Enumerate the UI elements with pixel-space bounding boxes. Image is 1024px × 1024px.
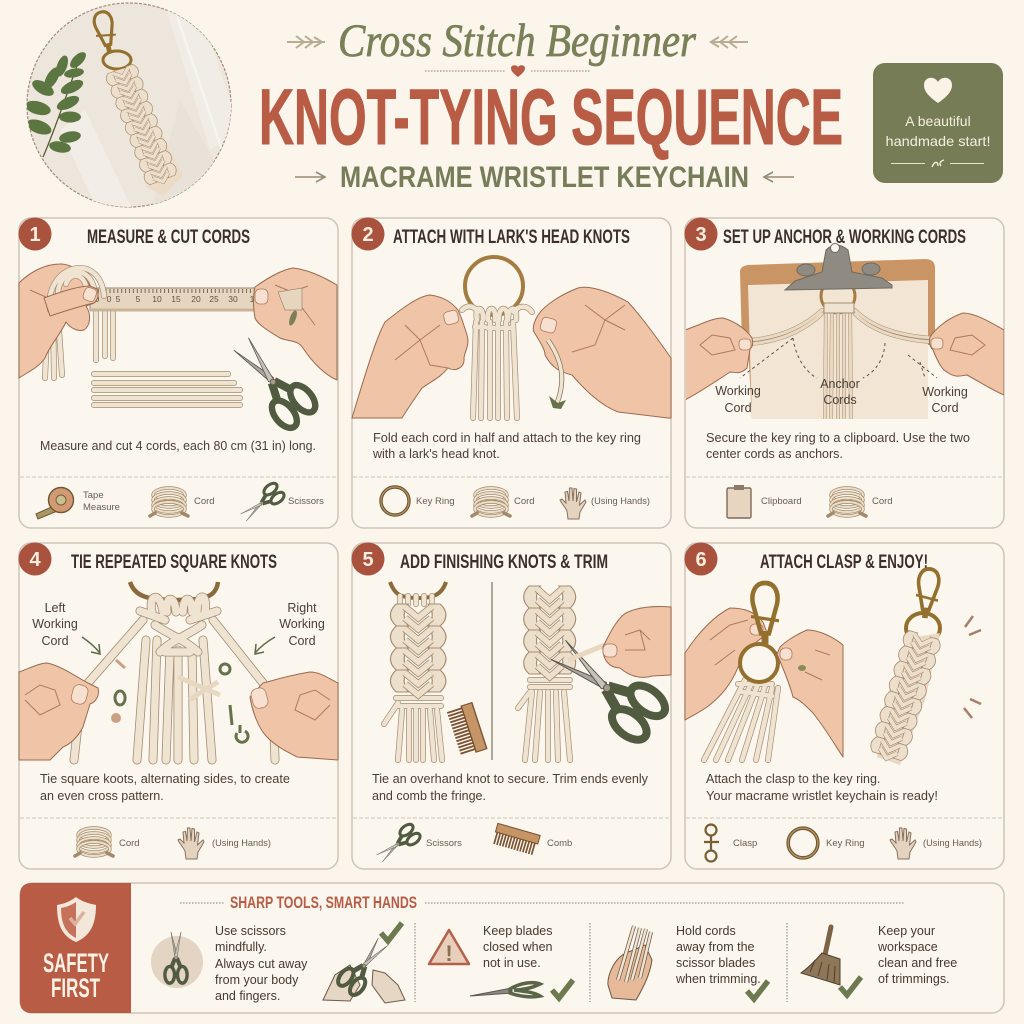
label working cord right: Cord bbox=[931, 401, 959, 415]
clasp bbox=[751, 583, 779, 644]
left hand bbox=[19, 663, 99, 760]
tip 1 text: Always cut away bbox=[215, 957, 308, 971]
subtitle arrow right bbox=[764, 172, 794, 182]
scissors icon bbox=[237, 481, 286, 525]
instruction 2: Fold each cord in half and attach to the key ring bbox=[373, 431, 641, 445]
panel 6: attach clasp and enjoy bbox=[684, 542, 1004, 869]
ruler bbox=[90, 288, 300, 310]
ruler: 5 bbox=[136, 294, 141, 304]
key ring on board bbox=[820, 289, 856, 314]
scissors bbox=[542, 629, 671, 746]
instruction 5: Tie an overhand knot to secure. Trim ends evenly bbox=[372, 772, 649, 786]
tip 1 illustration: hands with scissors bbox=[323, 933, 405, 1003]
fringe in progress bbox=[704, 680, 778, 760]
finished keychain bbox=[868, 568, 942, 765]
left hand bbox=[352, 295, 468, 418]
tip 3 illustration: hand holding cords bbox=[608, 926, 652, 1000]
badge: handmade start! bbox=[886, 133, 990, 149]
ruler: 10 bbox=[152, 294, 162, 304]
cord label: Cord bbox=[872, 496, 893, 507]
panel 3: set up anchor and working cords: center cords as anchors. bbox=[706, 447, 843, 461]
tip 1 text: mindfully. bbox=[215, 940, 267, 954]
right hand bbox=[777, 630, 843, 757]
right hand bbox=[929, 313, 1004, 395]
label working cord left: Cord bbox=[724, 401, 752, 415]
scissors label: Scissors bbox=[288, 496, 324, 507]
comb icon bbox=[492, 823, 540, 856]
tip 4 text: clean and free bbox=[878, 956, 957, 970]
hands label: (Using Hands) bbox=[212, 838, 271, 849]
tip 3 text: when trimming. bbox=[675, 972, 761, 986]
label right working cord: Working bbox=[279, 617, 325, 631]
scissors bbox=[225, 330, 320, 432]
right hand bbox=[533, 287, 671, 418]
ruler: 25 bbox=[209, 294, 219, 304]
tip 2 icon: warning triangle: ! bbox=[445, 941, 453, 966]
clasp icon bbox=[704, 824, 719, 862]
hand holding cord bbox=[568, 607, 671, 677]
tip 2 text: not in use. bbox=[483, 956, 541, 970]
label left working cord: Cord bbox=[41, 634, 69, 648]
instruction 4: Tie square koots, alternating sides, to create bbox=[40, 772, 290, 786]
tip 1 icon: scissors in circle bbox=[151, 932, 203, 988]
cord icon bbox=[150, 488, 188, 516]
folding cord with arrow bbox=[548, 340, 566, 409]
leaf sprig bbox=[27, 52, 86, 158]
safety panel bbox=[20, 883, 1004, 1013]
left braid with ring bbox=[384, 582, 446, 760]
step number 5: 5 bbox=[362, 549, 374, 571]
cord label: Cord bbox=[119, 838, 140, 849]
key ring icon bbox=[381, 487, 409, 515]
hanging cords bbox=[45, 300, 113, 378]
keychain clasp and ring bbox=[91, 10, 131, 69]
panel 2: attach with lark's head knots bbox=[352, 218, 671, 528]
cord label: Cord bbox=[514, 496, 535, 507]
header photo: finished keychain on linen bbox=[24, 3, 240, 215]
step number 2 bbox=[352, 218, 384, 250]
tip 2 text: closed when bbox=[483, 940, 553, 954]
hands icon bbox=[178, 828, 204, 859]
knot cluster bbox=[140, 597, 217, 652]
hands label: (Using Hands) bbox=[591, 496, 650, 507]
ruler: 15 bbox=[171, 294, 181, 304]
label right working cord: Right bbox=[287, 601, 317, 615]
ruler: 0 bbox=[107, 294, 112, 304]
cord icon bbox=[75, 828, 113, 856]
badge bbox=[873, 63, 1003, 183]
tip 2 text: Keep blades bbox=[483, 924, 553, 938]
tape measure label: Tape bbox=[83, 490, 104, 501]
ruler: 30 bbox=[228, 294, 238, 304]
step number 3 bbox=[684, 218, 718, 250]
heart divider bbox=[425, 65, 591, 77]
panel 4: tie repeated square knots bbox=[18, 542, 338, 869]
subtitle arrow left bbox=[295, 172, 325, 182]
panel 1: measure and cut cords bbox=[18, 218, 338, 528]
key ring arc bbox=[130, 582, 218, 600]
panel 6: attach clasp and enjoy: Your macrame wristlet keychain is ready! bbox=[706, 789, 938, 803]
ruler: 0 bbox=[95, 294, 100, 304]
key ring bbox=[740, 644, 778, 682]
step number 1: 1 bbox=[29, 224, 41, 246]
panel 5: add finishing knots and trim bbox=[352, 542, 671, 869]
comb bbox=[447, 703, 487, 757]
label working cord right: Working bbox=[922, 385, 968, 399]
right hand bbox=[250, 672, 338, 760]
panel 4: tie repeated square knots: an even cross pattern. bbox=[40, 789, 164, 803]
panel 3: set up anchor and working cords bbox=[684, 218, 1004, 528]
cord icon bbox=[472, 488, 510, 516]
shield icon bbox=[57, 897, 96, 942]
tip 4 text: Keep your bbox=[878, 924, 935, 938]
label left working cord: Working bbox=[32, 617, 78, 631]
tip 3 check bbox=[747, 981, 768, 999]
tip 1 text: Use scissors bbox=[215, 924, 286, 938]
hanging cords with knots bbox=[462, 306, 532, 418]
vertical divider bbox=[491, 582, 493, 760]
metal clip bbox=[785, 244, 892, 290]
tip 1 text: from your body bbox=[215, 973, 299, 987]
ruler: 20 bbox=[191, 294, 201, 304]
badge: A beautiful bbox=[905, 113, 971, 129]
key ring icon bbox=[788, 828, 818, 858]
tip 1 check bbox=[381, 923, 402, 941]
tip 4 illustration: broom bbox=[801, 927, 840, 985]
tape measure icon bbox=[36, 488, 74, 519]
right braid being trimmed bbox=[518, 586, 576, 760]
tip 1 text: and fingers. bbox=[215, 989, 280, 1003]
safety text: SAFETY bbox=[43, 948, 109, 978]
tip 3 text: scissor blades bbox=[676, 956, 755, 970]
dashed leader lines bbox=[740, 338, 937, 378]
tip 4 check bbox=[840, 977, 861, 995]
cord icon bbox=[828, 488, 866, 516]
left hand bbox=[685, 608, 767, 720]
tip 2 illustration: closed scissors bbox=[470, 983, 540, 997]
left thumb bbox=[44, 286, 98, 316]
arrow left bbox=[82, 637, 100, 654]
left hand bbox=[685, 318, 753, 400]
safety first block: FIRST bbox=[51, 973, 100, 1003]
heading 2: ATTACH WITH LARK'S HEAD KNOTS bbox=[393, 227, 630, 248]
arrow right bbox=[255, 637, 275, 654]
label anchor cords: Anchor bbox=[820, 377, 860, 391]
heading 1: MEASURE & CUT CORDS bbox=[87, 227, 250, 248]
step number 6 bbox=[684, 542, 718, 576]
step number 3: 3 bbox=[695, 224, 707, 246]
label anchor cords: Cords bbox=[823, 393, 857, 407]
cord loop over hand bbox=[50, 268, 104, 310]
key ring label: Key Ring bbox=[826, 838, 865, 849]
clipboard icon bbox=[727, 485, 751, 518]
hands icon bbox=[560, 488, 586, 519]
instruction 6: Attach the clasp to the key ring. bbox=[706, 772, 880, 786]
heading 6: ATTACH CLASP & ENJOY! bbox=[760, 552, 928, 573]
step number 4: 4 bbox=[29, 549, 41, 571]
scissors icon bbox=[373, 822, 422, 866]
ruler: 1 bbox=[250, 294, 255, 304]
tip 4 text: of trimmings. bbox=[878, 972, 950, 986]
step number 6: 6 bbox=[695, 549, 707, 571]
left hand bbox=[19, 264, 98, 378]
right hand bbox=[254, 268, 337, 380]
clasp label: Clasp bbox=[733, 838, 757, 849]
step number 1 bbox=[18, 218, 52, 250]
tip 3 text: away from the bbox=[676, 940, 755, 954]
cut cords bbox=[94, 374, 240, 405]
keychain braid bbox=[104, 63, 183, 196]
clipboard label: Clipboard bbox=[761, 496, 802, 507]
key ring bbox=[465, 257, 523, 315]
clipboard bbox=[740, 259, 935, 419]
cord label: Cord bbox=[194, 496, 215, 507]
anchor cords bbox=[750, 303, 932, 419]
panel 5: add finishing knots and trim: and comb the fringe. bbox=[372, 789, 486, 803]
step number 5 bbox=[352, 542, 384, 576]
tip 2 check bbox=[552, 980, 573, 998]
scissors label: Scissors bbox=[426, 838, 462, 849]
tip 4 text: workspace bbox=[877, 940, 938, 954]
instruction 3: Secure the key ring to a clipboard. Use the two bbox=[706, 431, 970, 445]
hands icon bbox=[890, 828, 916, 859]
panel 2: attach with lark's head knots: with a lark's head knot. bbox=[372, 447, 500, 461]
label working cord left: Working bbox=[715, 384, 761, 398]
heading 5: ADD FINISHING KNOTS & TRIM bbox=[400, 552, 608, 573]
leaf ornament right bbox=[710, 36, 748, 48]
step number 2: 2 bbox=[362, 224, 374, 246]
script title: Cross Stitch Beginner bbox=[338, 15, 697, 67]
safety first block bbox=[20, 883, 131, 1013]
step number 4 bbox=[18, 542, 52, 576]
safety heading: SHARP TOOLS, SMART HANDS bbox=[230, 893, 417, 912]
heading 4: TIE REPEATED SQUARE KNOTS bbox=[71, 552, 277, 573]
label right working cord: Cord bbox=[288, 634, 316, 648]
label left working cord: Left bbox=[45, 601, 65, 615]
floating cord tips and hooks bbox=[111, 660, 248, 742]
subtitle: MACRAME WRISTLET KEYCHAIN bbox=[340, 161, 749, 194]
instruction 1: Measure and cut 4 cords, each 80 cm (31 in) long. bbox=[40, 439, 316, 453]
leaf ornament left bbox=[287, 36, 325, 48]
tape measure label: Measure bbox=[83, 502, 120, 513]
tip 3 text: Hold cords bbox=[676, 924, 736, 938]
hanging cords and working cords bbox=[74, 620, 275, 760]
tip 2 icon: warning triangle bbox=[429, 930, 469, 966]
comb label: Comb bbox=[547, 838, 572, 849]
ruler: 5 bbox=[116, 294, 121, 304]
key ring label: Key Ring bbox=[416, 496, 455, 507]
sparkle marks bbox=[964, 616, 981, 718]
hands label: (Using Hands) bbox=[923, 838, 982, 849]
